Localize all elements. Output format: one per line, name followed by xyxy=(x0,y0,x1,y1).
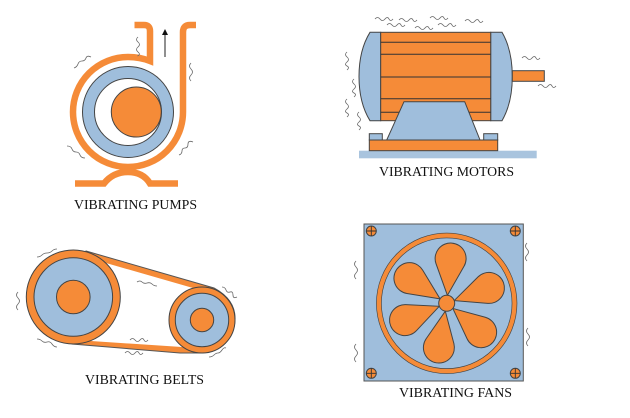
motor base plate xyxy=(369,140,498,151)
vibration marks: pump xyxy=(67,37,193,158)
pump volute casing xyxy=(73,25,196,167)
large pulley xyxy=(26,250,120,344)
vibration marks: motor xyxy=(346,16,556,130)
motor shaft xyxy=(512,71,544,81)
vibration marks: belts xyxy=(16,249,237,357)
label: vibrating belts: VIBRATING BELTS xyxy=(85,373,204,388)
belt inner gap xyxy=(91,263,193,347)
label: vibrating pumps: VIBRATING PUMPS xyxy=(74,198,197,213)
pump outer ring xyxy=(82,66,174,158)
motor pedestal xyxy=(387,102,480,140)
arrow: outlet flow xyxy=(162,29,168,57)
panel: vibrating belts xyxy=(16,249,237,357)
fan blades xyxy=(385,242,509,366)
motor ground xyxy=(359,151,537,158)
pump impeller xyxy=(111,87,161,137)
small pulley xyxy=(169,287,235,353)
panel: vibrating pumps xyxy=(67,25,196,184)
fan hub xyxy=(439,295,455,311)
motor mounting feet xyxy=(369,134,498,140)
motor left end cap xyxy=(359,32,381,121)
motor body with cooling fins xyxy=(381,32,491,121)
vibration marks: fan xyxy=(354,243,530,362)
label: vibrating motors: VIBRATING MOTORS xyxy=(379,165,514,180)
fan guard ring fill xyxy=(379,235,514,371)
label: vibrating fans: VIBRATING FANS xyxy=(399,386,512,401)
panel: vibrating fans xyxy=(354,224,530,381)
motor right end cap xyxy=(491,32,512,121)
fan housing xyxy=(364,224,523,381)
panel: vibrating motors xyxy=(346,16,556,158)
fan guard ring xyxy=(379,235,514,371)
pump inner opening xyxy=(94,78,162,146)
fan mounting bolts xyxy=(366,226,520,378)
pump base xyxy=(75,172,178,184)
belt loop xyxy=(60,251,235,353)
